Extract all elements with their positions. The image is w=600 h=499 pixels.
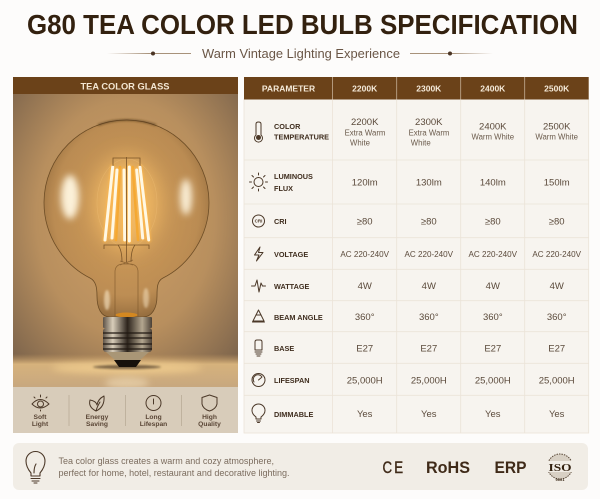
photo: screw base (93, 317, 161, 389)
row: color temperature: White (411, 138, 431, 148)
row: wattage: 4W (486, 281, 500, 292)
description text: perfect for home, hotel, restaurant and decorative lighting. (58, 468, 290, 478)
row: CRI (252, 215, 565, 228)
spec table (244, 77, 589, 433)
description text: Tea color glass creates a warm and cozy atmosphere, (58, 456, 274, 466)
row: wattage (252, 280, 564, 292)
row: voltage: AC 220-240V (340, 250, 390, 259)
label: long lifespan: Long (145, 414, 162, 421)
mark: ISO (547, 454, 573, 482)
row: CRI: CRI (255, 219, 262, 224)
row: color temperature: TEMPERATURE (274, 132, 329, 142)
icon: eye (32, 395, 49, 411)
panel: footer (13, 443, 588, 490)
row: base: E27 (484, 344, 501, 354)
label: soft light: Soft (34, 414, 47, 421)
row: color temperature: Warm White (535, 132, 578, 142)
row: color temperature: 2300K (415, 117, 443, 128)
row: lifespan: LIFESPAN (274, 376, 310, 385)
row: color temperature: 2400K (479, 122, 507, 132)
row: voltage: AC 220-240V (532, 250, 582, 259)
panel: bulb photo (13, 77, 238, 389)
panel heading (13, 77, 238, 94)
table header: 2300K (416, 84, 442, 94)
label: soft light: Light (32, 421, 49, 428)
row: beam angle: 360° (483, 312, 503, 323)
table header: 2500K (544, 84, 570, 94)
mark: ISO: ISO (548, 463, 572, 474)
row: color temperature: Extra Warm (345, 128, 385, 138)
row: CRI: ≥80 (357, 216, 373, 228)
mark: CE: CE (382, 459, 403, 477)
row: color temperature: COLOR (274, 122, 301, 131)
subtitle (107, 47, 493, 61)
mark: RoHS: RoHS (426, 458, 470, 477)
row: dimmable: Yes (485, 409, 501, 420)
row: color temperature: 2200K (351, 117, 379, 128)
row: dimmable: DIMMABLE (274, 410, 313, 419)
table header: 2200K (352, 84, 378, 94)
photo: glass bulb (44, 120, 209, 318)
row: lifespan (252, 374, 575, 386)
row: dimmable: Yes (357, 409, 373, 420)
row: wattage: 4W (550, 281, 564, 292)
row: base: E27 (356, 344, 373, 354)
row: beam angle: 360° (355, 312, 375, 323)
row: base: E27 (420, 344, 437, 354)
row: color temperature (254, 117, 578, 148)
row: luminous flux: LUMINOUS (274, 172, 313, 181)
row: beam angle: 360° (419, 312, 439, 323)
row: lifespan: 25,000H (475, 376, 511, 386)
row: voltage: AC 220-240V (404, 250, 454, 259)
row: voltage: VOLTAGE (274, 250, 308, 259)
label: long lifespan: Lifespan (140, 421, 167, 428)
label: high quality: Quality (198, 421, 221, 428)
row: luminous flux (250, 172, 570, 193)
row: color temperature: White (350, 138, 370, 148)
icon: clock (146, 396, 161, 410)
row: lifespan: 25,000H (347, 376, 383, 386)
row: base: BASE (274, 344, 294, 353)
icon: leaf (90, 396, 104, 411)
row: beam angle: BEAM ANGLE (274, 313, 323, 322)
row: base (255, 340, 565, 356)
row: lifespan: 25,000H (539, 376, 575, 386)
filaments (105, 167, 149, 241)
row: wattage: WATTAGE (274, 282, 310, 291)
icon: shield (202, 395, 217, 411)
panel: feature strip (13, 387, 238, 433)
row: wattage: 4W (358, 281, 372, 292)
label: energy saving: Saving (86, 421, 108, 428)
mark: ISO: 9001 (556, 477, 565, 482)
table header: PARAMETER (262, 84, 315, 94)
panel heading: TEA COLOR GLASS (80, 82, 170, 92)
row: luminous flux: 140lm (480, 178, 506, 188)
label: energy saving: Energy (86, 414, 109, 421)
row: dimmable: Yes (549, 409, 565, 420)
row: dimmable (252, 404, 565, 422)
row: luminous flux: 130lm (416, 178, 442, 188)
row: CRI: CRI (274, 217, 287, 226)
row: CRI: ≥80 (485, 216, 501, 228)
table header: 2400K (480, 84, 506, 94)
row: dimmable: Yes (421, 409, 437, 420)
table header (244, 77, 589, 100)
row: color temperature: Warm White (472, 132, 514, 142)
row: luminous flux: 120lm (352, 178, 378, 188)
label: high quality: High (202, 414, 217, 421)
row: CRI: ≥80 (421, 216, 437, 228)
row: CRI: ≥80 (549, 216, 565, 228)
row: luminous flux: FLUX (274, 184, 293, 193)
row: color temperature: 2500K (543, 122, 571, 132)
row: luminous flux: 150lm (544, 178, 570, 188)
icon: light bulb (26, 452, 45, 483)
row: beam angle (252, 310, 567, 323)
row: base: E27 (548, 344, 565, 354)
subtitle: Warm Vintage Lighting Experience (202, 47, 400, 61)
row: lifespan: 25,000H (411, 376, 447, 386)
mark: ERP: ERP (494, 458, 526, 477)
row: voltage: AC 220-240V (468, 250, 518, 259)
stem and supports (104, 157, 149, 318)
row: voltage (254, 247, 582, 261)
row: color temperature: Extra Warm (409, 128, 449, 138)
row: beam angle: 360° (547, 312, 567, 323)
row: wattage: 4W (422, 281, 436, 292)
